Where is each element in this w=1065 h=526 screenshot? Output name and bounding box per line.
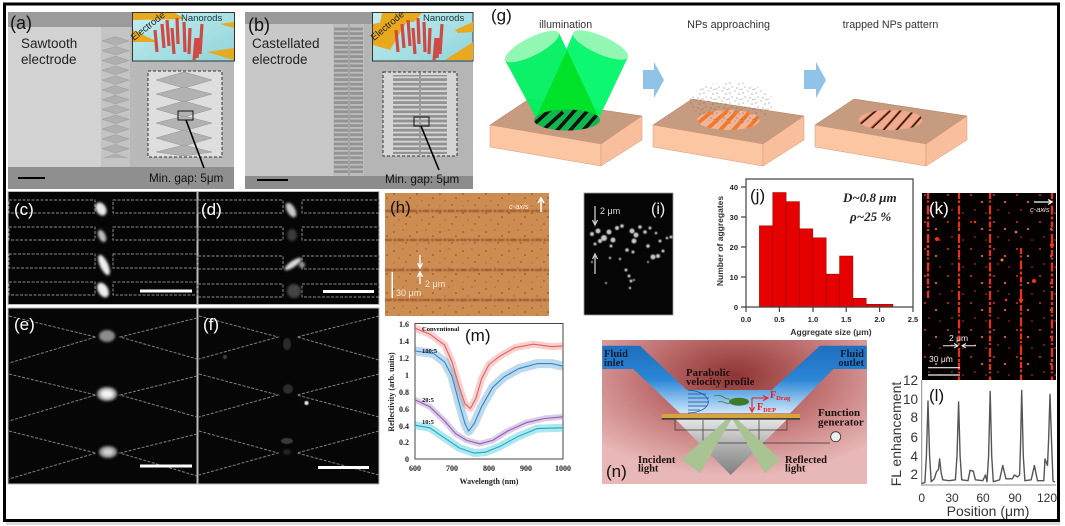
x ticks j: 1.5 [841, 315, 851, 324]
x tick labels m: 800 [483, 464, 495, 473]
electrode plate [662, 414, 800, 420]
x ticks l: 0 [918, 491, 925, 505]
reflected light label: Reflected [785, 455, 827, 466]
x ticks j: 0.0 [741, 315, 751, 324]
fluid outlet label: Fluid [840, 349, 864, 360]
fluid inlet label: Fluid [604, 349, 628, 360]
y tick labels m: 0.8 [399, 388, 409, 397]
x axis title l: Position (μm) [947, 503, 1029, 519]
x axis title m: Wavelength (nm) [460, 477, 519, 486]
x ticks j: 2.0 [874, 315, 885, 324]
label e: (e) [14, 315, 35, 334]
c-axis arrow k [1034, 200, 1052, 204]
scale bar e [140, 464, 192, 468]
x axis title j: Aggregate size (μm) [790, 327, 872, 337]
y ticks j: 20 [730, 243, 738, 252]
y ticks l: 4 [910, 449, 918, 464]
label m: (m) [465, 326, 490, 345]
function generator label: generator [818, 416, 864, 428]
label sawtooth electrode: Sawtooth [21, 36, 77, 51]
y ticks l: 2 [910, 467, 918, 482]
step 2 NPs approaching [653, 19, 804, 166]
axes box j [741, 179, 913, 312]
bacterium [714, 395, 749, 406]
label d: (d) [201, 200, 222, 219]
label i: (i) [651, 201, 665, 218]
prism [676, 420, 787, 475]
y ticks j: 30 [730, 213, 738, 222]
y ticks j: 10 [730, 273, 738, 282]
arrow 2 [804, 62, 826, 98]
scale bar f [318, 466, 369, 469]
panel d: fluorescence castellated 2 [198, 192, 379, 304]
rho annotation: ρ~25 % [849, 209, 891, 224]
x tick labels m [409, 464, 571, 473]
gap arrows h [418, 255, 422, 284]
incident light label: light [638, 464, 659, 474]
y ticks l [903, 373, 918, 482]
c-axis label k: c-axis [1030, 205, 1050, 214]
label f: (f) [203, 315, 219, 334]
label castellated electrode line 2: electrode [252, 52, 308, 67]
label k: (k) [929, 199, 949, 218]
fluid channel [602, 346, 867, 413]
F dep label: F [757, 402, 763, 413]
function generator label: Function [818, 407, 860, 419]
gap arrows k [943, 344, 976, 348]
label n: (n) [606, 462, 627, 481]
panel m: reflectivity chart [387, 320, 571, 486]
x ticks l: 60 [976, 491, 990, 505]
x ticks j [741, 315, 918, 324]
x ticks l: 30 [945, 491, 959, 505]
series labels m: 10:5 [422, 419, 435, 426]
panel g: illumination process [490, 6, 967, 166]
fluid outlet label: outlet [838, 358, 864, 369]
panel j: aggregate size histogram [715, 179, 918, 337]
parabolic velocity label: velocity profile [686, 376, 755, 388]
series labels m: Conventional [422, 326, 459, 333]
arrow 1 [643, 62, 664, 98]
reflected light label: light [785, 464, 806, 474]
panel b: castellated electrode [245, 9, 473, 189]
label g: (g) [491, 6, 512, 25]
inset: nanorods a: Nanorods [181, 13, 222, 24]
histogram bars [759, 192, 893, 307]
label 2 μm i: 2 μm [600, 206, 620, 216]
min gap label b: Min. gap: 5μm [385, 173, 459, 186]
x ticks l: 120 [1037, 491, 1057, 505]
min gap label a: Min. gap: 5μm [149, 172, 223, 185]
y ticks l: 8 [910, 410, 918, 425]
zoomed castellated region [383, 72, 457, 170]
step 3 trapped NPs pattern [815, 19, 967, 166]
label c: (c) [14, 200, 34, 219]
step 1 illumination [490, 19, 642, 166]
c-axis arrow h [538, 198, 544, 212]
x ticks j: 2.5 [908, 315, 918, 324]
label castellated electrode: Castellated [252, 36, 320, 51]
y tick labels m: 1.2 [399, 354, 409, 363]
y tick labels m [399, 320, 409, 464]
scale bar c [140, 290, 192, 292]
scale bar d [323, 290, 374, 293]
y ticks j: 40 [730, 183, 738, 192]
x ticks j: 0.5 [774, 315, 785, 324]
label sawtooth electrode line 2: electrode [21, 52, 77, 67]
parabolic velocity label: Parabolic [686, 367, 730, 379]
scale bars k [928, 368, 960, 375]
y ticks j [730, 183, 738, 312]
x tick labels m: 600 [409, 464, 421, 473]
y ticks j: 0 [734, 303, 738, 312]
function generator symbol [831, 432, 841, 442]
F drag label: Drag [776, 395, 791, 402]
arrows i [592, 206, 598, 274]
D annotation: D~0.8 μm [842, 190, 897, 205]
incident light [682, 420, 731, 473]
trace l [922, 390, 1055, 484]
x ticks l: 90 [1008, 491, 1022, 505]
panel f: fluorescence sawtooth 2 [198, 308, 379, 484]
label a: (a) [10, 13, 32, 33]
panel e: fluorescence sawtooth [8, 308, 197, 484]
label 2 μm h: 2 μm [425, 279, 445, 289]
label b: (b) [248, 15, 270, 35]
scale bar b [257, 179, 288, 181]
series labels m: 20:5 [422, 397, 435, 404]
series labels m: 100:5 [422, 348, 438, 355]
inset: nanorods b [369, 9, 473, 61]
x ticks l [918, 491, 1057, 505]
inset: nanorods b: Electrode [369, 9, 407, 43]
F drag label: F [770, 390, 776, 401]
panel c: fluorescence castellated [8, 192, 197, 304]
y tick labels m: 1.4 [399, 337, 409, 346]
y ticks l: 6 [910, 430, 918, 445]
x tick labels m: 900 [520, 464, 532, 473]
scale bar h [392, 272, 393, 298]
x ticks j: 1.0 [808, 315, 818, 324]
inset: nanorods a [129, 10, 234, 61]
reflected light [733, 420, 780, 473]
inset: nanorods a: Electrode [129, 10, 167, 43]
y axis title j: Number of aggregates [715, 196, 725, 286]
label 30 μm h: 30 μm [396, 288, 421, 298]
panel k: fluorescence stripes [922, 193, 1056, 380]
series labels m [422, 326, 459, 426]
velocity profile [688, 390, 709, 413]
y ticks l: 12 [903, 373, 918, 388]
y axis title m: Reflectivity (arb. units) [387, 352, 396, 432]
inset: nanorods b: Nanorods [423, 13, 464, 24]
panel h: optical micrograph [385, 193, 549, 316]
step 2 NPs approaching: NPs approaching [687, 19, 770, 31]
label 30 μm k: 30 μm [929, 354, 953, 364]
label l: (l) [929, 386, 944, 405]
y axis title l: FL enhancement [888, 382, 904, 486]
label h: (h) [390, 198, 411, 217]
axes l [922, 380, 1056, 485]
y tick labels m: 0.2 [399, 438, 409, 447]
incident light label: Incident [638, 455, 675, 466]
y tick labels m: 0.6 [399, 405, 409, 414]
x tick labels m: 1000 [555, 464, 571, 473]
c-axis label h: c-axis [509, 202, 529, 211]
y ticks l: 10 [903, 392, 918, 407]
wiring [675, 420, 830, 443]
force arrows [750, 396, 768, 412]
fluid inlet label: inlet [604, 358, 624, 369]
step 1 illumination: illumination [539, 19, 592, 31]
panel l: line chart [888, 373, 1057, 519]
panel i: dark field aggregates [584, 193, 673, 315]
scale bar a [18, 177, 45, 179]
x tick labels m: 700 [446, 464, 458, 473]
y tick labels m: 0 [405, 455, 409, 464]
panel a: sawtooth electrode [8, 10, 234, 189]
panel n: microfluidic schematic [602, 340, 867, 484]
F dep label: DEP [763, 407, 776, 414]
step 3 trapped NPs pattern: trapped NPs pattern [843, 19, 938, 31]
y tick labels m: 1.6 [399, 320, 409, 329]
zoomed sawtooth region [148, 71, 222, 168]
label j: (j) [750, 186, 765, 205]
red stripes [928, 193, 1052, 380]
label 2 μm k: 2 μm [949, 333, 968, 343]
y tick labels m: 0.4 [399, 422, 409, 431]
y tick labels m: 1 [405, 371, 409, 380]
